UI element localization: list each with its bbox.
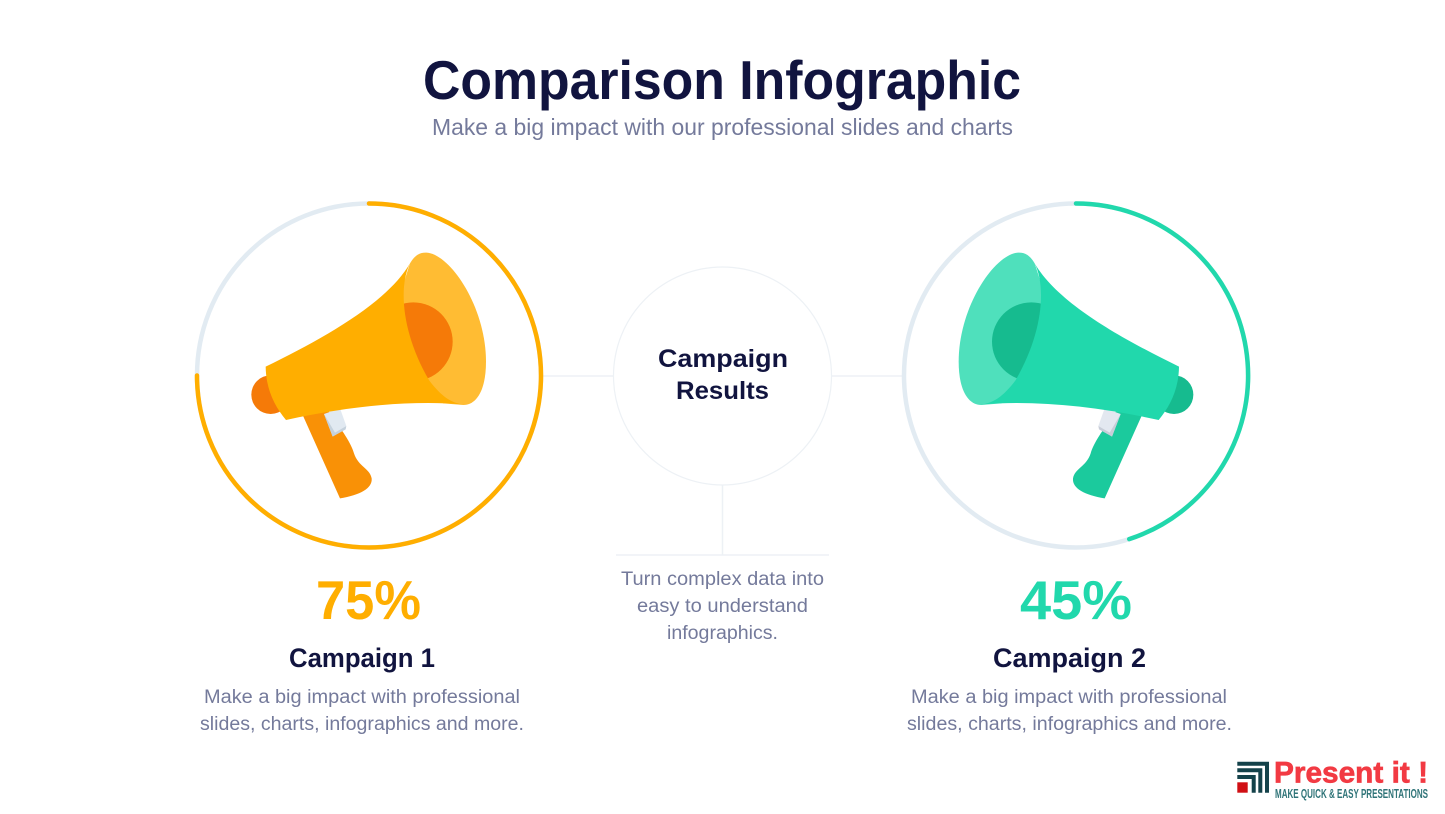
- center description: easy to understand: [637, 596, 808, 617]
- center description: [621, 569, 824, 644]
- campaign 2 description: Make a big impact with professional: [911, 687, 1227, 708]
- campaign 1 description: slides, charts, infographics and more.: [200, 714, 524, 735]
- logo mark: [1237, 762, 1269, 793]
- logo: Present it: [1237, 756, 1428, 801]
- panel: campaign 2: [904, 203, 1248, 735]
- panel: campaign 1: [197, 204, 541, 735]
- logo wordmark: Present it !: [1274, 756, 1428, 790]
- panel: campaign results center circle: [614, 267, 832, 485]
- campaign 2 description: slides, charts, infographics and more.: [907, 714, 1232, 735]
- subtitle: Make a big impact with our professional slides and charts: [432, 114, 1013, 140]
- progress ring 75%: [197, 204, 541, 548]
- campaign 1 heading: Campaign 1: [289, 643, 435, 673]
- center heading: [658, 345, 788, 405]
- campaign 2 heading: Campaign 2: [993, 643, 1146, 673]
- percentage 45: 45%: [1020, 569, 1132, 631]
- center heading: Campaign: [658, 345, 788, 373]
- progress ring 45%: [904, 203, 1248, 548]
- icon: green megaphone: [959, 253, 1193, 498]
- title: Comparison Infographic: [423, 49, 1021, 111]
- icon: orange megaphone: [251, 253, 486, 498]
- campaign 1 description: [200, 687, 524, 735]
- connector lines: [543, 376, 903, 555]
- center heading: Results: [676, 377, 769, 405]
- percentage 75: 75%: [316, 569, 421, 631]
- center description: Turn complex data into: [621, 569, 824, 590]
- center description: infographics.: [667, 623, 778, 644]
- campaign 1 description: Make a big impact with professional: [204, 687, 520, 708]
- campaign 2 description: [907, 687, 1232, 735]
